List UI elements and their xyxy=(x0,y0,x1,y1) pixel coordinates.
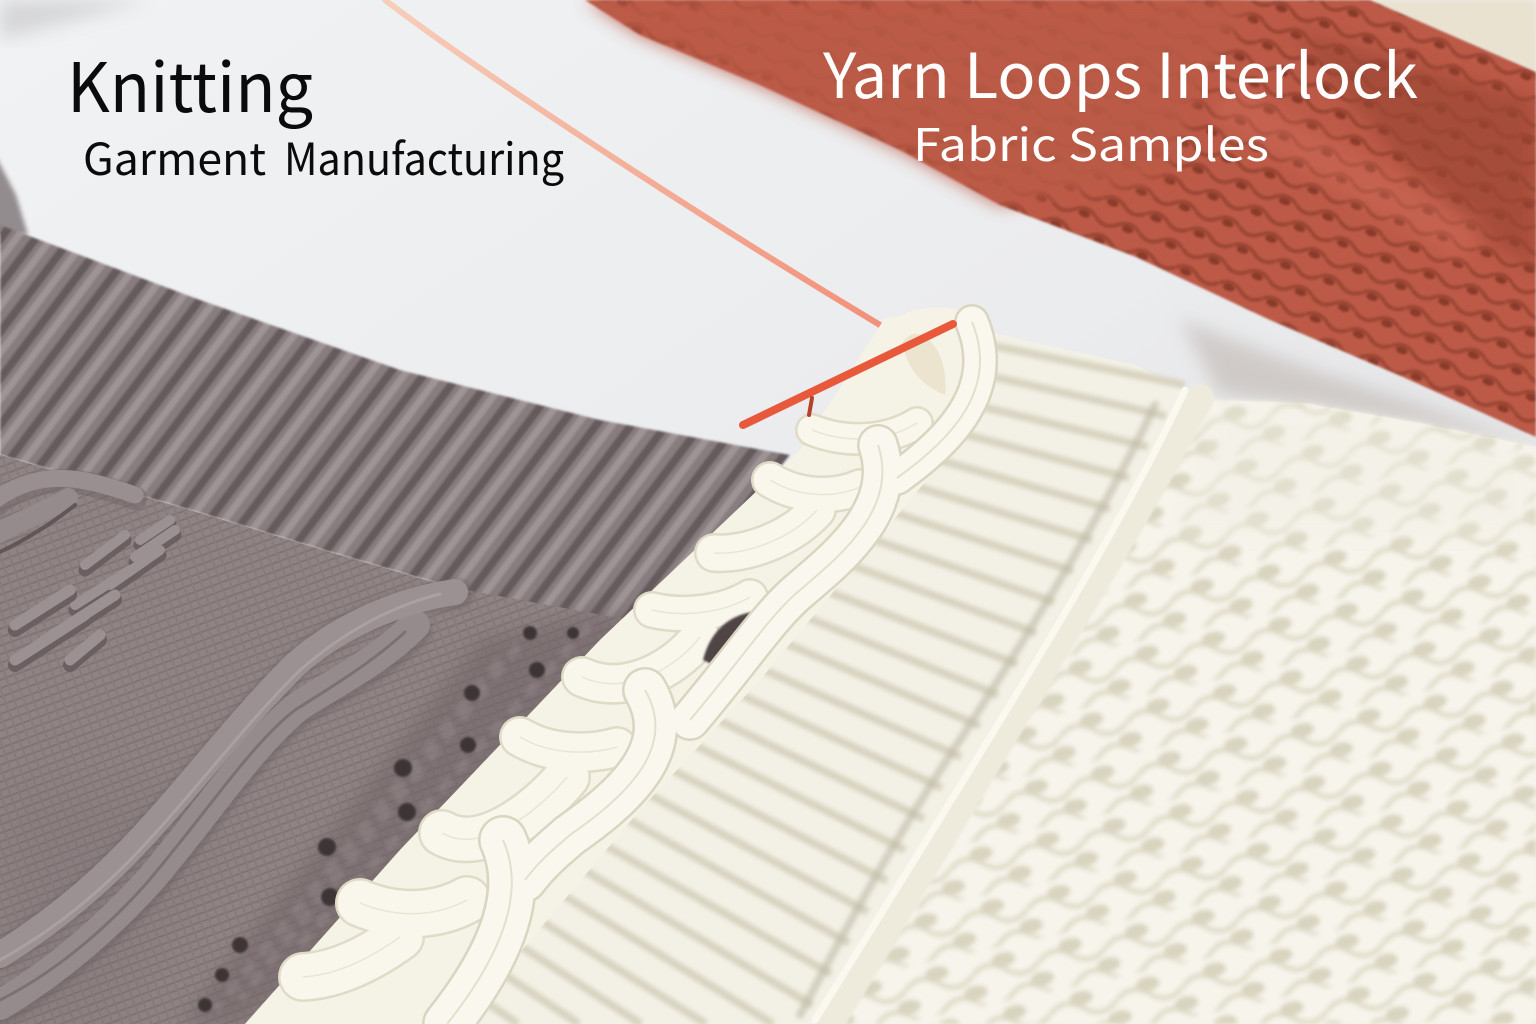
purl texture field xyxy=(820,400,1536,1024)
ribbed band xyxy=(480,340,1185,1024)
twisted rope cable xyxy=(0,592,458,1010)
cable braid xyxy=(245,312,985,1024)
grey stockinette body xyxy=(0,455,640,1024)
title: Knitting: Knitting xyxy=(67,33,313,132)
loop opening at top xyxy=(902,334,946,395)
top yarn loop xyxy=(891,319,978,350)
seam band xyxy=(800,390,1200,1024)
strand grooves xyxy=(447,322,980,1024)
eyelet band xyxy=(180,612,640,1024)
subtitle: Garment Manufacturing: Garment xyxy=(83,124,266,188)
side lobes xyxy=(303,423,917,977)
soft out-of-focus wash over upper purl xyxy=(1175,403,1536,540)
eyelet holes xyxy=(198,626,579,1012)
embossed cable: top left xyxy=(0,478,175,665)
main strands xyxy=(447,322,980,1024)
fabric sample: grey knit xyxy=(0,225,790,1024)
fabric sample: terracotta knit xyxy=(585,0,1536,437)
subheading: Fabric Samples: Fabric Samples xyxy=(913,109,1269,174)
fabric sample: cream knit xyxy=(245,312,1536,1024)
fabric sample: cream cloth top right xyxy=(1370,0,1536,72)
main strands shadow xyxy=(447,322,980,1024)
braid base xyxy=(245,312,985,1024)
grey ribbed collar xyxy=(0,225,790,640)
heading: Yarn Loops Interlock: Yarn Loops Interlock xyxy=(822,26,1418,116)
knitting needle xyxy=(743,324,953,425)
thread: peach yarn strand xyxy=(385,0,880,325)
cream base xyxy=(245,312,1536,1024)
subtitle: Garment Manufacturing: Manufacturing xyxy=(284,124,564,188)
hole in braid xyxy=(703,612,756,668)
